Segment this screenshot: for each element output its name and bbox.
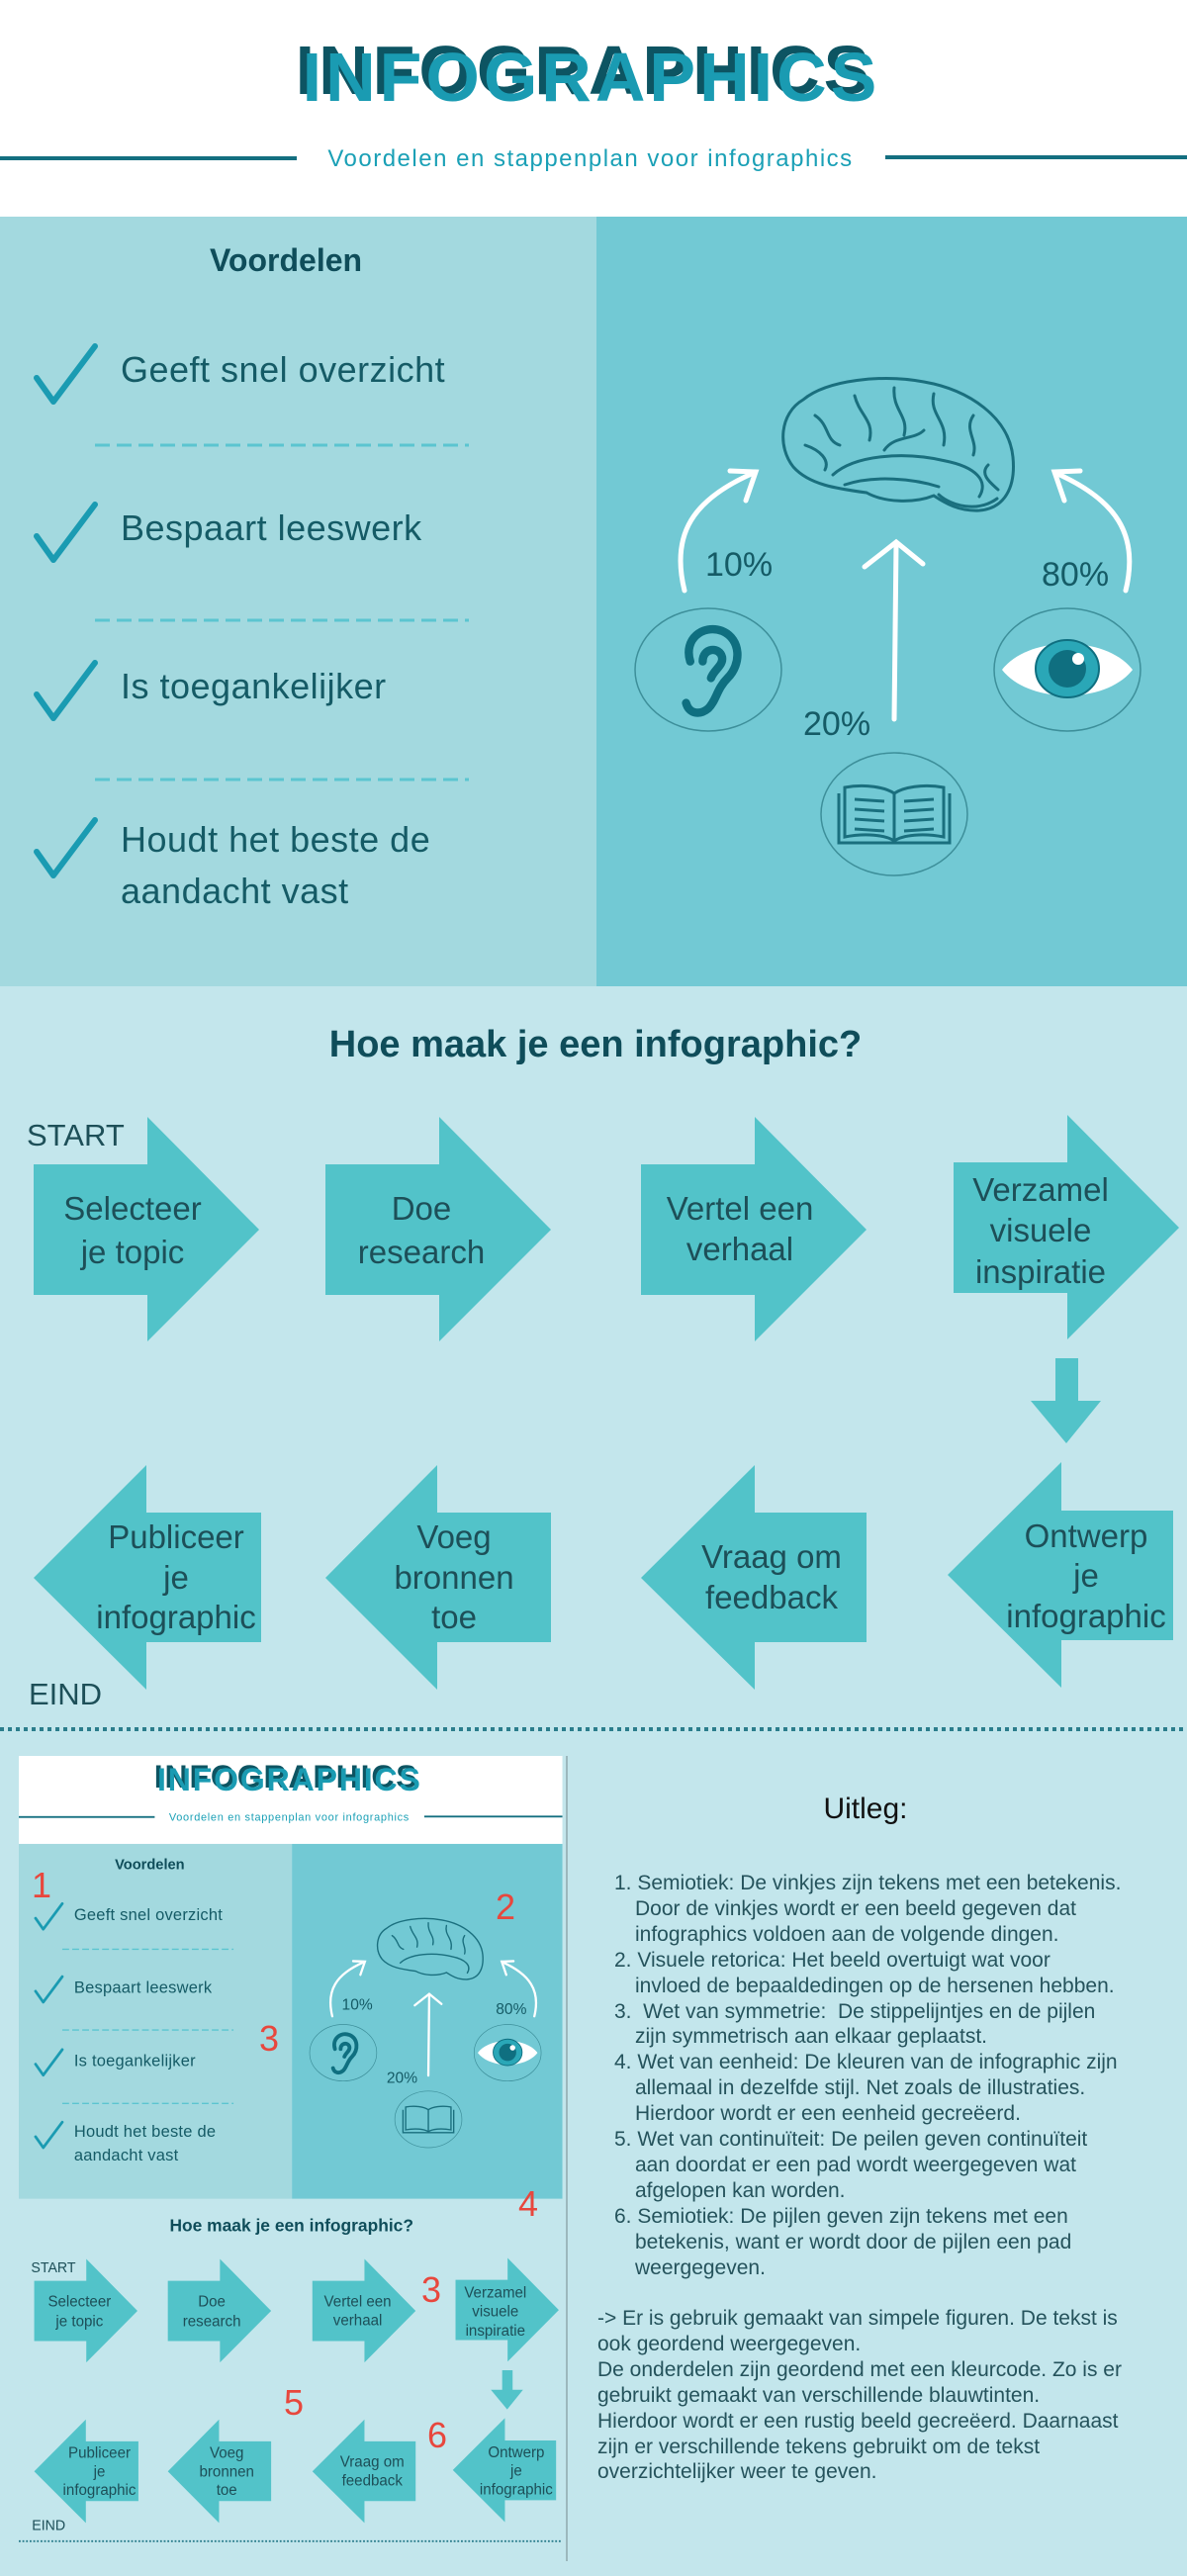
subtitle with lines — [0, 145, 1187, 172]
list item 3: Is toegankelijker — [121, 666, 387, 706]
text block: explanation list: Hierdoor wordt er een eenheid gecreëerd. — [635, 2102, 1021, 2125]
text block: explanation list: afgelopen kan worden. — [635, 2179, 845, 2202]
mini screenshot of infographic: inspiratie — [466, 2323, 525, 2340]
heading: hoe maak je een infographic: Hoe maak je een infographic? — [329, 1024, 862, 1065]
step arrow 7: bronnen: Voeg — [416, 1518, 492, 1555]
subtitle with lines: Voordelen en stappenplan voor infographics — [327, 145, 854, 172]
step arrow 2: research — [358, 1234, 485, 1270]
label: 10%: 10% — [705, 546, 773, 584]
mini screenshot of infographic: Houdt het beste de — [74, 2122, 216, 2141]
step arrow 8: publiceer: infographic — [96, 1599, 256, 1635]
mini screenshot of infographic: je — [509, 2462, 522, 2479]
mini screenshot of infographic: Voeg — [210, 2444, 243, 2461]
step arrow 3: verhaal — [686, 1231, 793, 1267]
icon: eye — [994, 608, 1141, 731]
mini screenshot of infographic: aandacht vast — [74, 2146, 179, 2164]
heading: voordelen: Voordelen — [210, 242, 362, 278]
step arrow 8: publiceer: je — [162, 1559, 189, 1596]
text block: conclusion paragraph: zijn er verschillende tekens gebruikt om de tekst — [597, 2436, 1040, 2458]
text block: explanation list: weergegeven. — [635, 2256, 766, 2279]
text block: conclusion paragraph: -> Er is gebruik gemaakt van simpele figuren. De tekst is — [597, 2307, 1118, 2330]
step arrow 3: Vertel een — [667, 1190, 813, 1227]
text block: conclusion paragraph: De onderdelen zijn geordend met een kleurcode. Zo is er — [597, 2358, 1122, 2381]
text block: explanation list: Door de vinkjes wordt er een beeld gegeven dat — [635, 1897, 1076, 1920]
list item 4: aandacht vast — [121, 871, 349, 911]
text block: conclusion paragraph: overzichtelijker weer te geven. — [597, 2460, 876, 2483]
step arrow 8: publiceer — [34, 1465, 261, 1690]
mini screenshot of infographic: Geeft snel overzicht — [74, 1905, 223, 1924]
mini screenshot of infographic: Bespaart leeswerk — [74, 1978, 213, 1997]
mini screenshot of infographic: feedback — [342, 2473, 403, 2490]
mini screenshot of infographic: visuele — [472, 2304, 518, 2321]
step arrow 7: bronnen: toe — [431, 1599, 477, 1635]
red annotation numbers: 1 — [32, 1865, 51, 1905]
step arrow 5: ontwerp: Ontwerp — [1025, 1518, 1147, 1554]
mini screenshot of infographic: 10% — [342, 1996, 373, 2013]
mini screenshot of infographic: Verzamel — [464, 2285, 526, 2302]
arrow: book to brain — [865, 542, 923, 719]
step arrow 4: visuele — [990, 1212, 1091, 1248]
step arrow 1: je topic — [80, 1234, 184, 1270]
mini screenshot of infographic: 20% — [387, 2070, 417, 2087]
red annotation numbers: 2 — [496, 1886, 515, 1927]
list item 1: Geeft snel overzicht — [121, 349, 445, 390]
text block: explanation list: 6. Semiotiek: De pijlen geven zijn tekens met een — [614, 2205, 1068, 2228]
step arrow 7: bronnen — [325, 1465, 551, 1690]
title: INFOGRAPHICS — [296, 32, 873, 109]
panel: brain diagram — [596, 217, 1187, 986]
icon: book — [821, 753, 967, 875]
label: eind: EIND — [29, 1677, 102, 1711]
list item 4: Houdt het beste de — [121, 819, 430, 860]
mini screenshot of infographic: infographic — [63, 2482, 137, 2499]
step arrow 2: Doe — [392, 1190, 451, 1227]
heading: uitleg: Uitleg: — [823, 1793, 908, 1825]
mini screenshot of infographic: INFOGRAPHICS — [154, 1759, 419, 1794]
mini screenshot of infographic: INFOGRAPHICS — [157, 1762, 422, 1797]
mini screenshot of infographic — [19, 1756, 568, 2561]
mini screenshot of infographic: Voordelen — [115, 1857, 185, 1873]
mini screenshot of infographic: research — [183, 2314, 240, 2331]
text block: explanation list: betekenis, want er wordt door de pijlen een pad — [635, 2231, 1071, 2254]
text block: explanation list — [614, 1872, 1121, 2279]
mini screenshot of infographic: Is toegankelijker — [74, 2051, 196, 2070]
list item 4 — [37, 819, 430, 911]
text block: explanation list: 3. Wet van symmetrie: De stippelijntjes en de pijlen — [614, 2000, 1095, 2023]
text block: explanation list: 1. Semiotiek: De vinkjes zijn tekens met een betekenis. — [614, 1872, 1121, 1894]
step arrow 6: feedback — [641, 1465, 867, 1690]
step arrow 1: Selecteer — [63, 1190, 202, 1227]
mini screenshot of infographic: START — [31, 2260, 76, 2276]
icon: brain — [783, 379, 1013, 510]
red annotation numbers: 3 — [421, 2269, 441, 2310]
mini screenshot of infographic: je — [93, 2463, 105, 2480]
mini screenshot of infographic: Publiceer — [68, 2444, 131, 2461]
mini screenshot of infographic: EIND — [32, 2518, 65, 2533]
main infographic — [0, 0, 1187, 1731]
list item 1 — [37, 346, 445, 402]
step arrow 6: feedback: Vraag om — [701, 1538, 842, 1575]
label: start: START — [27, 1118, 125, 1152]
mini screenshot of infographic: Doe — [198, 2293, 226, 2310]
step arrow 5: ontwerp: infographic — [1006, 1598, 1166, 1634]
step arrow 4: inspiratie — [975, 1253, 1106, 1290]
red annotation numbers: 5 — [284, 2382, 304, 2423]
arrow: down — [1031, 1358, 1101, 1443]
text block: explanation list: 2. Visuele retorica: Het beeld overtuigt wat voor — [614, 1949, 1050, 1972]
step arrow 6: feedback: feedback — [705, 1579, 838, 1615]
step arrow 3 — [641, 1117, 867, 1341]
text block: explanation list: 4. Wet van eenheid: De kleuren van de infographic zijn — [614, 2051, 1118, 2073]
mini screenshot of infographic: Vraag om — [340, 2454, 405, 2471]
mini screenshot of infographic: je topic — [54, 2314, 104, 2331]
text block: explanation list: 5. Wet van continuïteit: De peilen geven continuïteit — [614, 2128, 1087, 2151]
mini screenshot of infographic: Voordelen en stappenplan voor infographics — [169, 1811, 410, 1823]
arrow: ear to brain — [681, 471, 756, 591]
mini screenshot of infographic: Hoe maak je een infographic? — [169, 2215, 413, 2235]
title: INFOGRAPHICS — [303, 39, 880, 116]
step arrow 5: ontwerp — [948, 1462, 1173, 1688]
step arrow 4: Verzamel — [972, 1171, 1109, 1208]
text block: explanation list: allemaal in dezelfde stijl. Net zoals de illustraties. — [635, 2076, 1085, 2099]
label: 80%: 80% — [1042, 556, 1109, 594]
panel: voordelen — [0, 217, 596, 986]
step arrow 7: bronnen: bronnen — [394, 1559, 514, 1596]
text block: explanation list: zijn symmetrisch aan elkaar geplaatst. — [635, 2025, 987, 2048]
arrow: eye to brain — [1054, 471, 1130, 591]
label: 20%: 20% — [803, 705, 870, 743]
text block: conclusion paragraph: ook geordend weergegeven. — [597, 2333, 861, 2355]
text block: conclusion paragraph: Hierdoor wordt er een rustig beeld gecreëerd. Daarnaast — [597, 2410, 1118, 2433]
list item 3 — [37, 663, 387, 718]
mini screenshot of infographic: Selecteer — [47, 2293, 111, 2310]
step arrow 1 — [34, 1117, 259, 1341]
mini screenshot of infographic: 80% — [496, 2001, 527, 2018]
red annotation numbers: 6 — [427, 2415, 447, 2455]
mini screenshot of infographic: Ontwerp — [488, 2444, 544, 2461]
text block: explanation list: infographics voldoen aan de volgende dingen. — [635, 1923, 1059, 1946]
list item 2: Bespaart leeswerk — [121, 507, 422, 548]
mini screenshot of infographic: toe — [217, 2482, 237, 2499]
text block: conclusion paragraph: gebruikt gemaakt van verschillende blauwtinten. — [597, 2384, 1040, 2407]
text block: explanation list: invloed de bepaaldedingen op de hersenen hebben. — [635, 1975, 1115, 1997]
mini screenshot of infographic: Vertel een — [324, 2293, 392, 2310]
mini screenshot of infographic: verhaal — [333, 2312, 382, 2329]
icon: ear — [635, 608, 781, 731]
mini screenshot of infographic: infographic — [480, 2481, 553, 2498]
red annotation numbers: 4 — [518, 2183, 538, 2224]
mini screenshot of infographic: bronnen — [200, 2463, 254, 2480]
text block: conclusion paragraph — [597, 2307, 1122, 2483]
red annotation numbers: 3 — [259, 2018, 279, 2059]
step arrow 4 — [954, 1115, 1179, 1339]
step arrow 2 — [325, 1117, 551, 1341]
step arrow 5: ontwerp: je — [1072, 1557, 1099, 1594]
step arrow 8: publiceer: Publiceer — [108, 1518, 244, 1555]
list item 2 — [37, 505, 422, 560]
text block: explanation list: aan doordat er een pad wordt weergegeven wat — [635, 2154, 1076, 2176]
